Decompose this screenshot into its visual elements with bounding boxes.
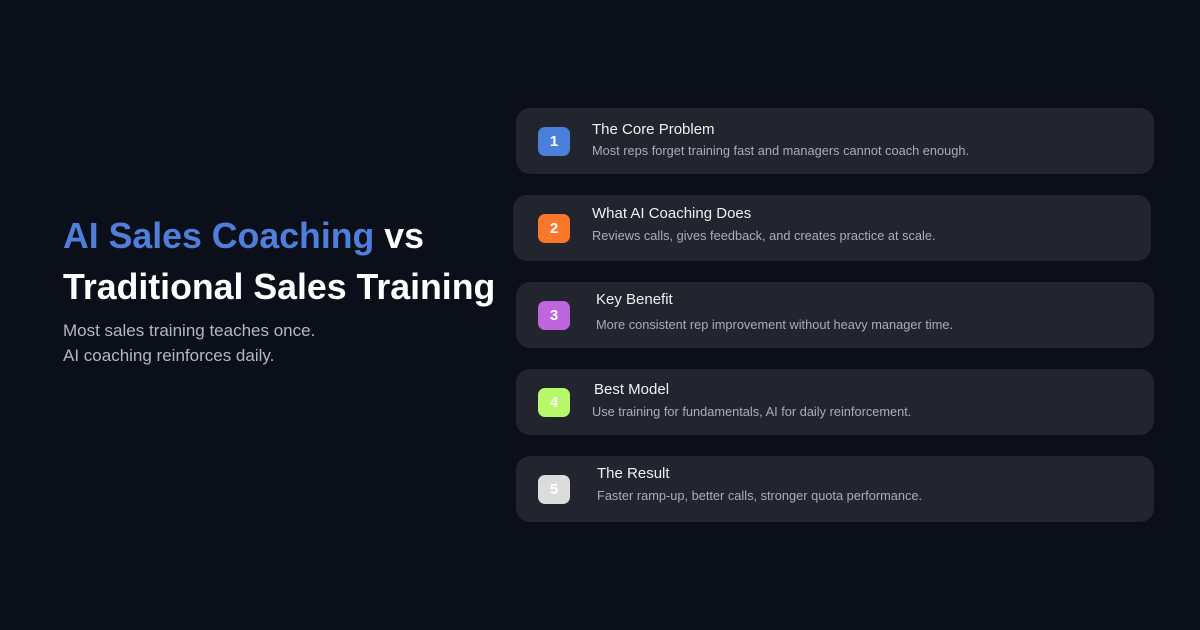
badge 5: 5 (550, 481, 558, 498)
subtitle: AI coaching reinforces daily. (63, 346, 274, 365)
badge 5 (538, 475, 570, 504)
card 4 (516, 369, 1154, 435)
title line 2: Traditional Sales Training (63, 267, 495, 307)
desc 4: Use training for fundamentals, AI for daily reinforcement. (592, 404, 911, 419)
heading 3: Key Benefit (596, 291, 673, 308)
subtitle: Most sales training teaches once. (63, 321, 315, 340)
heading 1: The Core Problem (592, 121, 715, 138)
card 3 (516, 282, 1154, 348)
badge 4 (538, 388, 570, 417)
title: AI Sales Coaching vs (63, 216, 424, 256)
desc 5: Faster ramp-up, better calls, stronger quota performance. (597, 488, 922, 503)
subtitle (63, 321, 315, 365)
card 1 (516, 108, 1154, 174)
desc 1: Most reps forget training fast and managers cannot coach enough. (592, 143, 969, 158)
badge 4: 4 (550, 394, 558, 411)
card 5 (516, 456, 1154, 522)
badge 1: 1 (550, 133, 558, 150)
card 2 (513, 195, 1151, 261)
desc 2: Reviews calls, gives feedback, and creates practice at scale. (592, 228, 936, 243)
badge 3: 3 (550, 307, 558, 324)
badge 2: 2 (550, 220, 558, 237)
heading 4: Best Model (594, 381, 669, 398)
desc 3: More consistent rep improvement without heavy manager time. (596, 317, 953, 332)
heading 2: What AI Coaching Does (592, 205, 751, 222)
badge 1 (538, 127, 570, 156)
badge 2 (538, 214, 570, 243)
badge 3 (538, 301, 570, 330)
heading 5: The Result (597, 465, 670, 482)
